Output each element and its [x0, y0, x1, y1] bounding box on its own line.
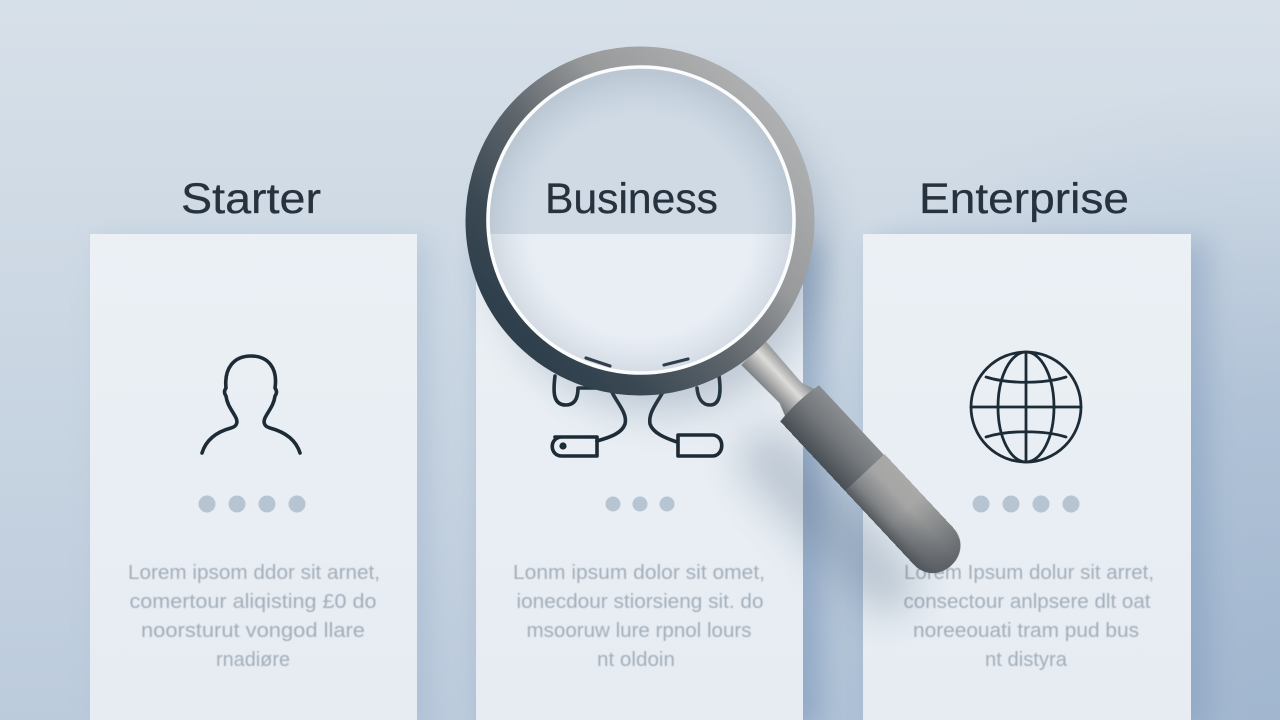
panel: Starter: [90, 175, 427, 720]
description text: comertour aliqisting £0 do: [130, 591, 376, 613]
handle neck: [739, 340, 815, 417]
rating dots: [198, 496, 306, 512]
description text: [128, 562, 380, 671]
metal ring: [476, 58, 804, 384]
heading: Business: Business: [545, 175, 718, 223]
icon: globe: [971, 352, 1081, 462]
grip dark section: [779, 384, 885, 492]
description text: nt distyra: [985, 649, 1068, 671]
description text: Lorem ipsom ddor sit arnet,: [128, 562, 380, 584]
shadow of glass: [495, 83, 928, 625]
panel: Business: [476, 234, 821, 720]
icon: network devices: [552, 376, 722, 456]
icon: user: [202, 356, 300, 453]
handle: [734, 335, 971, 584]
lens view: [490, 68, 792, 372]
description text: rnadiøre: [216, 649, 290, 671]
description text: msooruw lure rpnol lours: [526, 620, 752, 642]
description text: [904, 562, 1154, 671]
grip tip shading: [883, 494, 971, 584]
rating dots: [972, 496, 1080, 512]
white inner rim: [488, 67, 794, 373]
heading: Starter: Starter: [181, 175, 321, 223]
magnified icon fragments: [586, 358, 688, 366]
rating dots: [606, 496, 674, 512]
description text: Lonm ipsum dolor sit omet,: [513, 562, 765, 584]
heading: Enterprise: Enterprise: [919, 175, 1129, 223]
description text: nt oldoin: [597, 649, 675, 671]
grip light section: [845, 454, 971, 584]
description text: [513, 562, 765, 671]
magnifying glass: [476, 58, 971, 625]
description text: Lorem Ipsum dolur sit arret,: [904, 562, 1154, 584]
description text: noreeouati tram pud bus: [913, 620, 1139, 642]
description text: ionecdour stiorsieng sit. do: [516, 591, 764, 613]
description text: noorsturut vongod llare: [141, 620, 365, 642]
description text: consectour anlpsere dlt oat: [904, 591, 1151, 613]
icon dot: [559, 442, 567, 450]
panel: Enterprise: [863, 175, 1208, 720]
